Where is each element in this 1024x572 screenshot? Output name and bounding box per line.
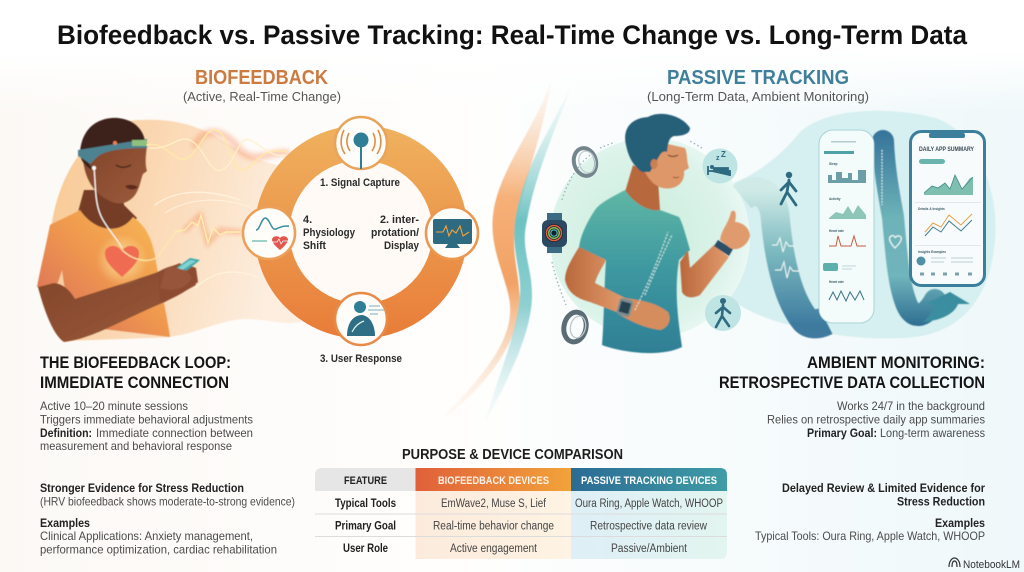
- heading: passive tracking: PASSIVE TRACKING: [667, 67, 849, 89]
- icon: sleep bubble: [702, 148, 738, 184]
- text block: biofeedback examples: Examples: [40, 516, 90, 530]
- loop step labels: 1. Signal Capture: [320, 177, 400, 189]
- text block: stronger evidence: Stronger Evidence for Stress Reduction: [40, 481, 244, 495]
- icon: walking figure: [781, 172, 796, 205]
- teal backdrop: [690, 111, 996, 338]
- text block: passive examples: Examples: [935, 516, 985, 530]
- title: Biofeedback vs. Passive Tracking: Real-Time Change vs. Long-Term Data: [57, 20, 968, 50]
- loop step labels: [303, 177, 420, 365]
- center divider swoosh: [440, 78, 572, 425]
- text block: ambient monitoring: AMBIENT MONITORING:: [807, 354, 985, 372]
- heading: biofeedback: BIOFEEDBACK: [195, 67, 329, 89]
- loop step labels: 3. User Response: [320, 353, 402, 365]
- text block: biofeedback examples: Clinical Applications: Anxiety management,: [40, 529, 253, 543]
- data ribbon: [742, 141, 970, 324]
- text block: biofeedback loop: Active 10–20 minute sessions: [40, 399, 188, 413]
- text block: passive examples: Typical Tools: Oura Ring, Apple Watch, WHOOP: [755, 529, 985, 543]
- heading: biofeedback: (Active, Real-Time Change): [183, 90, 341, 104]
- text block: biofeedback examples: [40, 516, 277, 556]
- text block: biofeedback loop: THE BIOFEEDBACK LOOP:: [40, 354, 231, 372]
- phone: daily app summary: Insights Examples: [918, 250, 946, 254]
- phone: daily app summary: [910, 132, 984, 286]
- loop step labels: 4.: [303, 214, 312, 226]
- text block: biofeedback loop: Triggers immediate behavioral adjustments: [40, 412, 253, 426]
- row: typical tools: [335, 498, 723, 510]
- icon: walking bubble: [705, 295, 741, 331]
- phone: daily app summary: DAILY APP SUMMARY: [919, 147, 974, 153]
- comparison table: [315, 468, 727, 559]
- green backdrop: [550, 138, 750, 338]
- row: user role: User Role: [343, 543, 388, 555]
- text block: stronger evidence: (HRV biofeedback shows moderate-to-strong evidence): [40, 494, 295, 508]
- row: primary goal: Primary Goal: [335, 520, 396, 532]
- node: user response icon: [335, 293, 387, 345]
- row: primary goal: Real-time behavior change: [433, 520, 554, 532]
- text block: delayed review: Delayed Review & Limited Evidence for: [782, 481, 985, 495]
- loop step labels: protation/: [371, 227, 419, 239]
- text block: delayed review: [782, 481, 985, 508]
- man with smart devices: [565, 114, 750, 353]
- table header row: FEATURE: [344, 475, 387, 487]
- dotted device orbit: [552, 140, 702, 305]
- text block: biofeedback examples: performance optimization, cardiac rehabilitation: [40, 542, 277, 556]
- long data strip: Heart rate: [829, 229, 844, 233]
- long data strip: Sleep: [829, 162, 838, 166]
- text block: ambient monitoring: [719, 354, 985, 440]
- arrow into app: [923, 292, 970, 322]
- orange backdrop: [49, 120, 300, 341]
- text block: ambient monitoring: Long-term awareness: [880, 426, 985, 440]
- icon: smart ring top: [571, 146, 599, 178]
- long data strip: Activity: [829, 197, 841, 201]
- loop step labels: Display: [384, 240, 420, 252]
- long data strip: Heart rate: [829, 280, 844, 284]
- text block: ambient monitoring: Relies on retrospective daily app summaries: [767, 412, 985, 426]
- text block: ambient monitoring: Works 24/7 in the background: [837, 399, 985, 413]
- loop step labels: Shift: [303, 240, 326, 252]
- row: typical tools: EmWave2, Muse S, Lief: [441, 498, 547, 510]
- comparison table heading: PURPOSE & DEVICE COMPARISON: [402, 447, 623, 463]
- row: primary goal: [335, 520, 708, 532]
- heading: passive tracking: [647, 67, 869, 104]
- notebooklm logo: NotebookLM: [963, 559, 1020, 571]
- loop step labels: Physiology: [303, 227, 356, 239]
- icon: smart watch: [542, 213, 567, 253]
- text block: biofeedback loop: Immediate connection between: [96, 426, 253, 440]
- text block: biofeedback loop: Definition:: [40, 426, 92, 440]
- text block: ambient monitoring: Primary Goal:: [807, 426, 877, 440]
- text block: stronger evidence: [40, 481, 295, 508]
- node: physiology shift icon: [243, 207, 295, 259]
- long data strip: [819, 130, 874, 323]
- row: user role: Passive/Ambient: [611, 543, 688, 555]
- node: signal capture icon: [335, 117, 387, 169]
- signal waves: [147, 130, 287, 288]
- phone: daily app summary: Details & Insights: [918, 207, 945, 211]
- heading: biofeedback: [183, 67, 341, 104]
- row: primary goal: Retrospective data review: [590, 520, 708, 532]
- table header row: PASSIVE TRACKING DEVICES: [581, 475, 717, 487]
- row: typical tools: Oura Ring, Apple Watch, WHOOP: [575, 498, 723, 510]
- loop ring: [272, 143, 450, 321]
- text block: biofeedback loop: [40, 354, 253, 453]
- icon: sleep bubble: z: [716, 155, 720, 162]
- text block: passive examples: [755, 516, 985, 543]
- person wearing headband: [37, 118, 200, 342]
- row: user role: [343, 543, 688, 555]
- table header row: BIOFEEDBACK DEVICES: [438, 475, 549, 487]
- text block: delayed review: Stress Reduction: [897, 494, 985, 508]
- row: user role: Active engagement: [450, 543, 538, 555]
- node: interpretation display icon: [426, 207, 478, 259]
- table header row: [315, 468, 727, 491]
- panel: biofeedback illustration: [37, 117, 478, 365]
- text block: biofeedback loop: measurement and behavioral response: [40, 439, 232, 453]
- row: typical tools: Typical Tools: [335, 498, 396, 510]
- icon: smart ring bottom: [561, 310, 589, 344]
- icon: sleep bubble: Z: [721, 150, 726, 159]
- loop step labels: 2. inter-: [380, 214, 419, 226]
- text block: biofeedback loop: IMMEDIATE CONNECTION: [40, 374, 229, 392]
- panel: passive tracking illustration: [542, 111, 996, 353]
- heading: passive tracking: (Long-Term Data, Ambient Monitoring): [647, 90, 869, 104]
- text block: ambient monitoring: RETROSPECTIVE DATA COLLECTION: [719, 374, 985, 392]
